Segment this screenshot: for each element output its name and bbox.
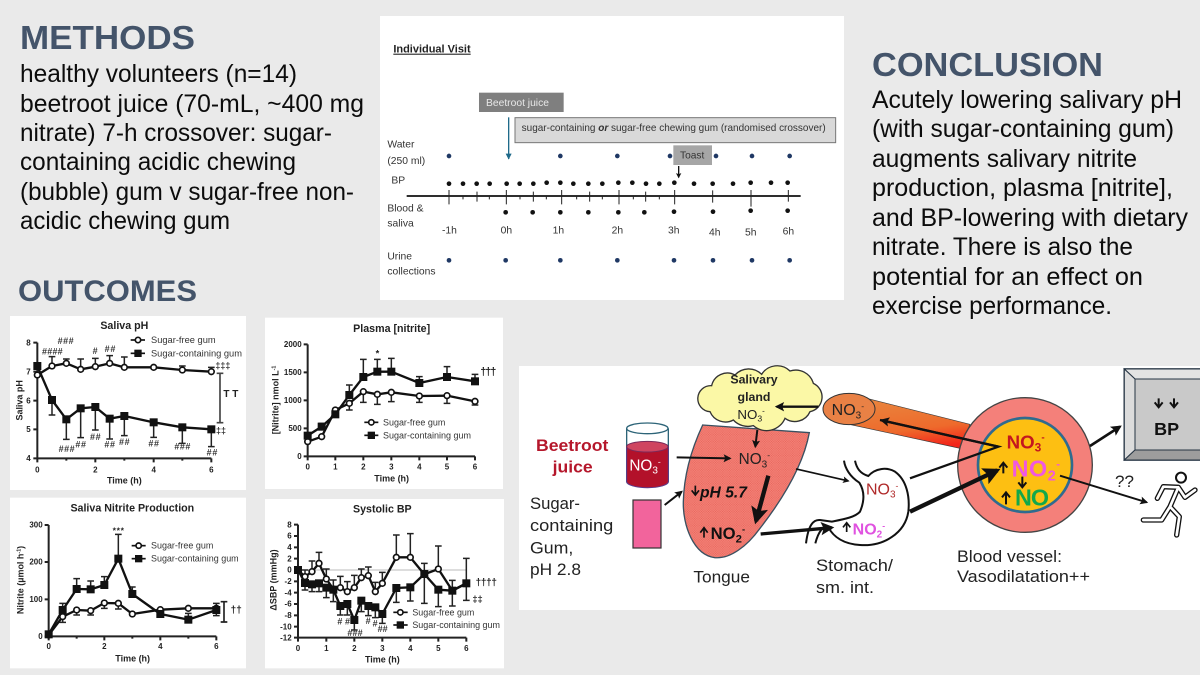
- conclusion text: and BP-lowering with dietary: [872, 204, 1188, 232]
- vessel nitrate label: -: [1041, 432, 1045, 443]
- axes: 6: [26, 396, 31, 405]
- significance markers: ##: [119, 437, 130, 447]
- axes: Saliva pH: [14, 380, 24, 421]
- significance markers: [113, 525, 242, 622]
- axes: 100: [29, 595, 43, 604]
- axes: 2: [287, 554, 292, 563]
- beaker of beetroot juice: NO: [629, 457, 652, 474]
- significance markers: ‡‡‡: [215, 360, 230, 370]
- axes: 5: [436, 644, 441, 653]
- vessel nitrite label: 2: [1048, 469, 1056, 485]
- gum description: pH 2.8: [530, 560, 581, 579]
- artery with nitrate: NO: [832, 402, 856, 419]
- significance markers: ###: [347, 628, 363, 638]
- chart title: Saliva pH: [100, 320, 148, 332]
- beaker of beetroot juice: 3: [652, 466, 658, 477]
- series: sugar-containing gum: [298, 570, 466, 620]
- methods text: [20, 60, 364, 235]
- significance markers: [337, 578, 497, 638]
- beetroot juice label: juice: [552, 457, 593, 476]
- chart: systolic BP: [265, 499, 504, 668]
- tongue nitrate label: 3: [762, 459, 768, 470]
- axes: 5: [445, 463, 450, 472]
- legend: Sugar-containing gum: [383, 431, 471, 441]
- axes: 6: [464, 644, 469, 653]
- axes: 1000: [284, 396, 302, 405]
- conclusion text: production, plasma [nitrite],: [872, 174, 1173, 202]
- conclusion heading: CONCLUSION: [872, 46, 1103, 83]
- significance markers: ####: [42, 346, 63, 356]
- chart title: Plasma [nitrite]: [353, 323, 430, 335]
- salivary gland cloud: gland: [738, 390, 770, 404]
- axes: 200: [29, 558, 43, 567]
- conclusion text: exercise performance.: [872, 292, 1112, 320]
- vessel nitrate label: 3: [1035, 441, 1042, 455]
- axes: 6: [209, 465, 214, 474]
- significance markers: ##: [207, 447, 217, 457]
- beetroot juice label: [536, 436, 609, 476]
- axes: 4: [151, 465, 156, 474]
- axes: 0: [35, 465, 40, 474]
- axes: ): [15, 546, 25, 549]
- tongue nitrite label: -: [742, 524, 745, 534]
- series: sugar-containing gum: [37, 366, 211, 429]
- blood and saliva dots: [503, 208, 790, 215]
- significance markers: T T: [223, 389, 238, 400]
- significance markers: ###: [58, 336, 74, 346]
- axes: 6: [214, 642, 219, 651]
- significance markers: [42, 336, 238, 457]
- series: sugar-containing gum: [308, 372, 475, 436]
- axes: [14, 338, 214, 485]
- methods heading: METHODS: [20, 19, 195, 56]
- row labels: collections: [387, 266, 436, 277]
- stomach nitrate label: NO: [866, 481, 890, 498]
- significance markers: #: [345, 616, 350, 626]
- vessel nitrite label: -: [1056, 458, 1060, 470]
- axes: -4: [285, 588, 292, 597]
- axes: Nitrite (µmol h: [15, 554, 25, 614]
- axes: 1: [333, 463, 338, 472]
- axes: ΔSBP (mmHg): [269, 549, 279, 611]
- legend: Sugar-containing gum: [151, 348, 242, 358]
- stomach small arrow: [843, 523, 850, 532]
- tongue small arrows: [692, 486, 708, 538]
- axes: 6: [473, 463, 478, 472]
- outcomes heading: OUTCOMES: [18, 275, 197, 308]
- stomach caption: Stomach/: [816, 556, 893, 575]
- axes: 1500: [284, 368, 302, 377]
- salivary gland cloud: NO: [737, 407, 757, 422]
- BP dots: [447, 180, 790, 186]
- axes: 0: [297, 452, 302, 461]
- significance markers: ##: [148, 438, 159, 448]
- time axis: -1h: [442, 226, 457, 237]
- axes: -12: [280, 633, 292, 642]
- BP outcome button: BP: [1154, 419, 1179, 439]
- significance markers: ###: [174, 442, 190, 452]
- flow arrows right: [880, 420, 1147, 512]
- axes: 5: [26, 425, 31, 434]
- significance markers: #: [373, 618, 378, 628]
- beetroot juice box: Beetroot juice: [486, 98, 549, 109]
- row labels: BP: [391, 176, 405, 187]
- vessel nitrate label: NO: [1007, 431, 1035, 452]
- axes: -6: [285, 600, 292, 609]
- significance markers: ##: [90, 432, 101, 442]
- axes: 0: [287, 566, 292, 575]
- axes: 3: [380, 644, 385, 653]
- time axis: 1h: [553, 226, 564, 237]
- significance markers: ##: [378, 624, 388, 634]
- tongue nitrite label: 2: [736, 533, 742, 545]
- row labels: [387, 140, 436, 277]
- methods text: beetroot juice (70-mL, ~400 mg: [20, 90, 364, 118]
- BP outcome button: [1124, 369, 1200, 460]
- arrow: beetroot juice dose: [507, 117, 511, 159]
- error bars: [302, 534, 470, 630]
- chart: plasma nitrite: [265, 318, 503, 489]
- axes: 2: [352, 644, 357, 653]
- legend: Sugar-free gum: [412, 607, 474, 617]
- axes: 4: [287, 543, 292, 552]
- axes: 4: [158, 642, 163, 651]
- axes: Time (h): [107, 475, 142, 485]
- chewing gum box: sugar-containing or sugar-free chewing gum (randomised crossover): [522, 123, 826, 134]
- salivary gland cloud: 3: [757, 414, 762, 424]
- stomach nitrite label: 2: [877, 530, 883, 541]
- row labels: Water: [387, 140, 415, 151]
- axes: 0: [296, 644, 301, 653]
- significance markers: #: [337, 616, 342, 626]
- axes: Time (h): [374, 473, 409, 483]
- axes: 2: [102, 642, 107, 651]
- urine dots: [447, 258, 792, 263]
- tongue caption: Tongue: [693, 567, 750, 586]
- legend: [393, 607, 500, 630]
- tongue pH label: pH 5.7: [699, 485, 748, 502]
- conclusion text: potential for an effect on: [872, 263, 1143, 291]
- legend: Sugar-containing gum: [151, 554, 239, 564]
- error bars: [318, 358, 478, 427]
- icon: runner: [1143, 473, 1195, 535]
- tongue nitrate label: -: [767, 450, 770, 460]
- axes: 6: [287, 532, 292, 541]
- legend: [132, 541, 239, 564]
- significance markers: ##: [105, 344, 115, 354]
- gum description: containing: [530, 516, 613, 535]
- axes: 7: [26, 367, 31, 376]
- chewing gum box: [515, 118, 836, 143]
- small arrows in vessel: [999, 463, 1026, 504]
- axes: 0: [46, 642, 51, 651]
- artery with nitrate: -: [861, 401, 864, 411]
- gum description: [530, 494, 613, 579]
- conclusion text: [872, 86, 1188, 320]
- time axis: 5h: [745, 228, 757, 239]
- significance markers: #: [366, 616, 371, 626]
- methods text: healthy volunteers (n=14): [20, 60, 297, 88]
- axes: 3: [389, 463, 394, 472]
- tongue nitrite label: NO: [711, 524, 736, 543]
- methods text: containing acidic chewing: [20, 148, 296, 176]
- axes: [269, 520, 469, 665]
- row labels: (250 ml): [387, 156, 425, 167]
- axes: [Nitrite] nmol L: [270, 370, 280, 434]
- salivary gland cloud: [698, 366, 822, 431]
- significance markers: †††: [480, 366, 496, 378]
- beaker of beetroot juice: -: [658, 456, 661, 466]
- series: sugar-free gum: [308, 392, 475, 442]
- artery with nitrate: [823, 393, 970, 448]
- time axis: 4h: [709, 228, 721, 239]
- error bars: [49, 356, 215, 447]
- axes: [15, 521, 219, 663]
- arrow: toast: [677, 166, 681, 177]
- question marks label: ??: [1115, 472, 1134, 491]
- legend: Sugar-containing gum: [412, 620, 500, 630]
- toast box: [673, 145, 712, 165]
- conclusion text: Acutely lowering salivary pH: [872, 86, 1182, 114]
- legend: [131, 335, 242, 358]
- beetroot juice label: Beetroot: [536, 436, 609, 455]
- blood vessel caption: [957, 547, 1090, 586]
- vessel nitric oxide label: NO: [1015, 485, 1049, 511]
- axes: 500: [288, 424, 302, 433]
- significance markers: ###: [59, 444, 75, 454]
- conclusion text: nitrate. There is also the: [872, 233, 1133, 261]
- time axis: [407, 190, 801, 239]
- beaker of beetroot juice: [627, 423, 668, 488]
- axes: 8: [287, 520, 292, 529]
- axes: 1: [324, 644, 329, 653]
- toast box: Toast: [680, 151, 704, 162]
- time axis: 0h: [501, 226, 512, 237]
- axes: -8: [285, 611, 292, 620]
- axes: 4: [26, 454, 31, 463]
- stomach: [806, 461, 909, 545]
- row labels: Blood &: [387, 204, 424, 215]
- tongue nitrate label: NO: [739, 451, 762, 468]
- timeline title: Individual Visit: [393, 44, 471, 56]
- salivary gland cloud: -: [762, 407, 765, 416]
- flow arrows left: [665, 407, 848, 534]
- blood vessel caption: Vasodilatation++: [957, 567, 1090, 586]
- significance markers: ***: [113, 525, 125, 535]
- legend: Sugar-free gum: [151, 335, 216, 345]
- chart title: Systolic BP: [353, 504, 412, 516]
- axes: [270, 340, 478, 483]
- significance markers: [376, 348, 496, 378]
- series: sugar-containing gum: [49, 559, 216, 634]
- axes: Time (h): [115, 653, 150, 663]
- row labels: saliva: [387, 219, 414, 230]
- axes: Time (h): [365, 655, 400, 665]
- axes: -2: [285, 577, 292, 586]
- axes: 4: [408, 644, 413, 653]
- axes: 4: [417, 463, 422, 472]
- axes: 2: [361, 463, 366, 472]
- series: sugar-free gum: [49, 603, 216, 635]
- time axis: 3h: [668, 226, 680, 237]
- stomach nitrate label: -: [896, 480, 899, 490]
- significance markers: ##: [75, 440, 86, 450]
- significance markers: ††: [231, 605, 242, 616]
- legend: Sugar-free gum: [383, 418, 445, 428]
- series: sugar-free gum: [37, 363, 211, 375]
- gum description: Sugar-: [530, 494, 580, 513]
- axes: 0: [305, 463, 310, 472]
- panel: mechanism diagram: [519, 366, 1200, 610]
- significance markers: ‡‡: [216, 426, 226, 436]
- axes: -1: [272, 366, 278, 370]
- axes: 0: [38, 632, 43, 641]
- methods text: nitrate) 7-h crossover: sugar-: [20, 119, 332, 147]
- salivary gland cloud: Salivary: [730, 372, 778, 386]
- time axis: 6h: [783, 226, 794, 237]
- panel: study timeline: [380, 16, 844, 300]
- significance markers: *: [376, 348, 380, 358]
- legend: Sugar-free gum: [151, 541, 213, 551]
- axes: 8: [26, 338, 31, 347]
- legend: [364, 418, 471, 441]
- stomach caption: [816, 556, 893, 597]
- axes: 2000: [284, 340, 302, 349]
- blood vessel caption: Blood vessel:: [957, 547, 1062, 566]
- stomach caption: sm. int.: [816, 578, 874, 597]
- vessel nitrite label: NO: [1012, 456, 1047, 482]
- conclusion text: augments salivary nitrite: [872, 145, 1137, 173]
- water dots: [447, 154, 792, 158]
- axes: 300: [29, 521, 43, 530]
- beetroot juice box: [479, 93, 564, 112]
- stomach nitrite label: -: [882, 520, 885, 530]
- chart title: Saliva Nitrite Production: [70, 502, 194, 514]
- error bars: [59, 534, 220, 622]
- conclusion text: (with sugar-containing gum): [872, 115, 1174, 143]
- axes: -1: [17, 549, 23, 554]
- tongue: [683, 425, 809, 586]
- chart: saliva nitrite production: [10, 498, 246, 668]
- artery with nitrate: 3: [856, 410, 862, 421]
- axes: -10: [280, 622, 292, 631]
- significance markers: #: [93, 346, 98, 356]
- series: sugar-free gum: [298, 557, 466, 592]
- chart: saliva pH: [10, 316, 246, 490]
- row labels: Urine: [387, 251, 412, 262]
- gum description: Gum,: [530, 538, 573, 557]
- stomach nitrate label: 3: [890, 490, 896, 501]
- stomach nitrite label: NO: [853, 521, 877, 538]
- methods text: (bubble) gum v sugar-free non-: [20, 178, 354, 206]
- significance markers: ##: [104, 440, 115, 450]
- blood vessel cross-section: [958, 398, 1092, 532]
- chewing gum stick: [633, 500, 661, 548]
- time axis: 2h: [612, 226, 623, 237]
- significance markers: ††††: [476, 578, 497, 589]
- significance markers: ‡‡: [472, 594, 483, 604]
- axes: 2: [93, 465, 98, 474]
- methods text: acidic chewing gum: [20, 207, 230, 235]
